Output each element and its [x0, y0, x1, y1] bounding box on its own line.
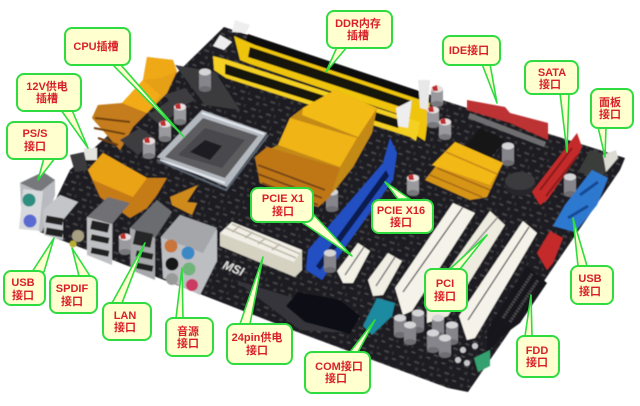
chip [286, 292, 360, 334]
callout: SPDIF: 接口 [61, 294, 83, 308]
callout: FDD: 接口 [526, 355, 548, 369]
callout: USB onboard: 接口 [579, 284, 601, 298]
FDD connector [487, 266, 547, 353]
callout: PCI [425, 235, 487, 311]
callout: SPDIF [50, 248, 97, 313]
callout: audio: 接口 [177, 336, 199, 350]
callout: PCI: PCI [436, 278, 454, 290]
rear IO: audio [161, 215, 217, 295]
SATA connectors [532, 133, 582, 270]
callout: USB rear: USB [11, 277, 35, 289]
callout: COM: 接口 [325, 371, 347, 385]
rear IO: LAN [130, 200, 172, 280]
front panel header [578, 150, 620, 178]
PCI slots [395, 203, 537, 340]
MOSFET blocks [120, 88, 195, 155]
callout: PCIE X16 [372, 182, 433, 233]
24pin power connector [220, 222, 302, 277]
IDE connector [467, 100, 548, 140]
blue USB headers [553, 170, 608, 232]
green pin header [474, 350, 490, 372]
callout: CPU socket: CPU插槽 [73, 39, 119, 53]
callout: CPU socket [65, 28, 184, 137]
callout: LAN: LAN [114, 310, 136, 322]
callout: LAN [103, 243, 151, 340]
callout: FDD: FDD [526, 345, 548, 357]
lower capacitors [324, 250, 478, 366]
callout: 24pin power: 24pin供电 [232, 330, 282, 344]
callout: PS/2 [7, 122, 67, 180]
callout: 24pin power: 接口 [246, 343, 268, 357]
callout: IDE: IDE接口 [449, 43, 489, 57]
capacitors top-left [143, 68, 576, 212]
callout: IDE [443, 36, 500, 103]
callout: DDR memory: DDR内存 [335, 16, 381, 30]
callout: FDD [517, 295, 559, 377]
callout: audio: 音源 [177, 324, 199, 338]
southbridge heatsink [425, 142, 503, 200]
callout: audio [166, 268, 213, 356]
callout: SPDIF: SPDIF [56, 283, 88, 295]
callout: 12V power [17, 74, 88, 148]
12V connector [84, 148, 97, 160]
PCIE x1 slots [337, 243, 402, 296]
callout: SATA [525, 61, 578, 152]
northbridge heatsink [255, 90, 377, 207]
callout: PS/2: PS/S [22, 128, 48, 140]
callout: USB onboard [571, 218, 613, 304]
callout: PCIE X1: PCIE X1 [262, 193, 304, 205]
callout: COM: COM接口 [315, 359, 363, 373]
callout: DDR memory: 插槽 [347, 28, 369, 42]
COM connector [363, 298, 395, 335]
callout: PCIE X1: 接口 [272, 204, 294, 218]
callout: SATA: 接口 [539, 77, 561, 91]
rear IO: SPDIF [70, 230, 84, 248]
callout: 12V power: 12V供电 [26, 79, 68, 93]
rear IO: display and USB [87, 197, 130, 265]
rear IO: USB stack [43, 195, 78, 240]
callout: PCIE X16: 接口 [390, 215, 412, 229]
callout: front panel [591, 89, 633, 157]
large black capacitor [505, 174, 535, 196]
callout: PCI: 接口 [434, 289, 456, 303]
rear IO: PS/2 [19, 172, 55, 232]
callout: USB onboard: USB [578, 273, 602, 285]
callout: 24pin power [227, 257, 292, 364]
MSI logo: MSI [221, 258, 247, 279]
callout: LAN: 接口 [114, 320, 136, 334]
CPU socket [157, 110, 268, 190]
callout: DDR memory [326, 11, 392, 72]
callout: PCIE X16: PCIE X16 [377, 205, 425, 217]
callout: PS/2: 接口 [24, 139, 46, 153]
callout: USB rear [4, 238, 54, 305]
callout: USB rear: 接口 [12, 288, 34, 302]
callout: SATA: SATA [538, 67, 566, 79]
callout: front panel: 接口 [599, 107, 621, 121]
VRM heatsink upper [92, 57, 177, 150]
callout: COM [305, 320, 375, 393]
DDR memory slots [213, 20, 437, 141]
VRM heatsink lower [88, 153, 198, 218]
PCIE x16 slot [306, 138, 397, 280]
callout: front panel: 面板 [599, 95, 621, 109]
callout: 12V power: 插槽 [36, 91, 58, 105]
callout: PCIE X1 [251, 188, 352, 256]
